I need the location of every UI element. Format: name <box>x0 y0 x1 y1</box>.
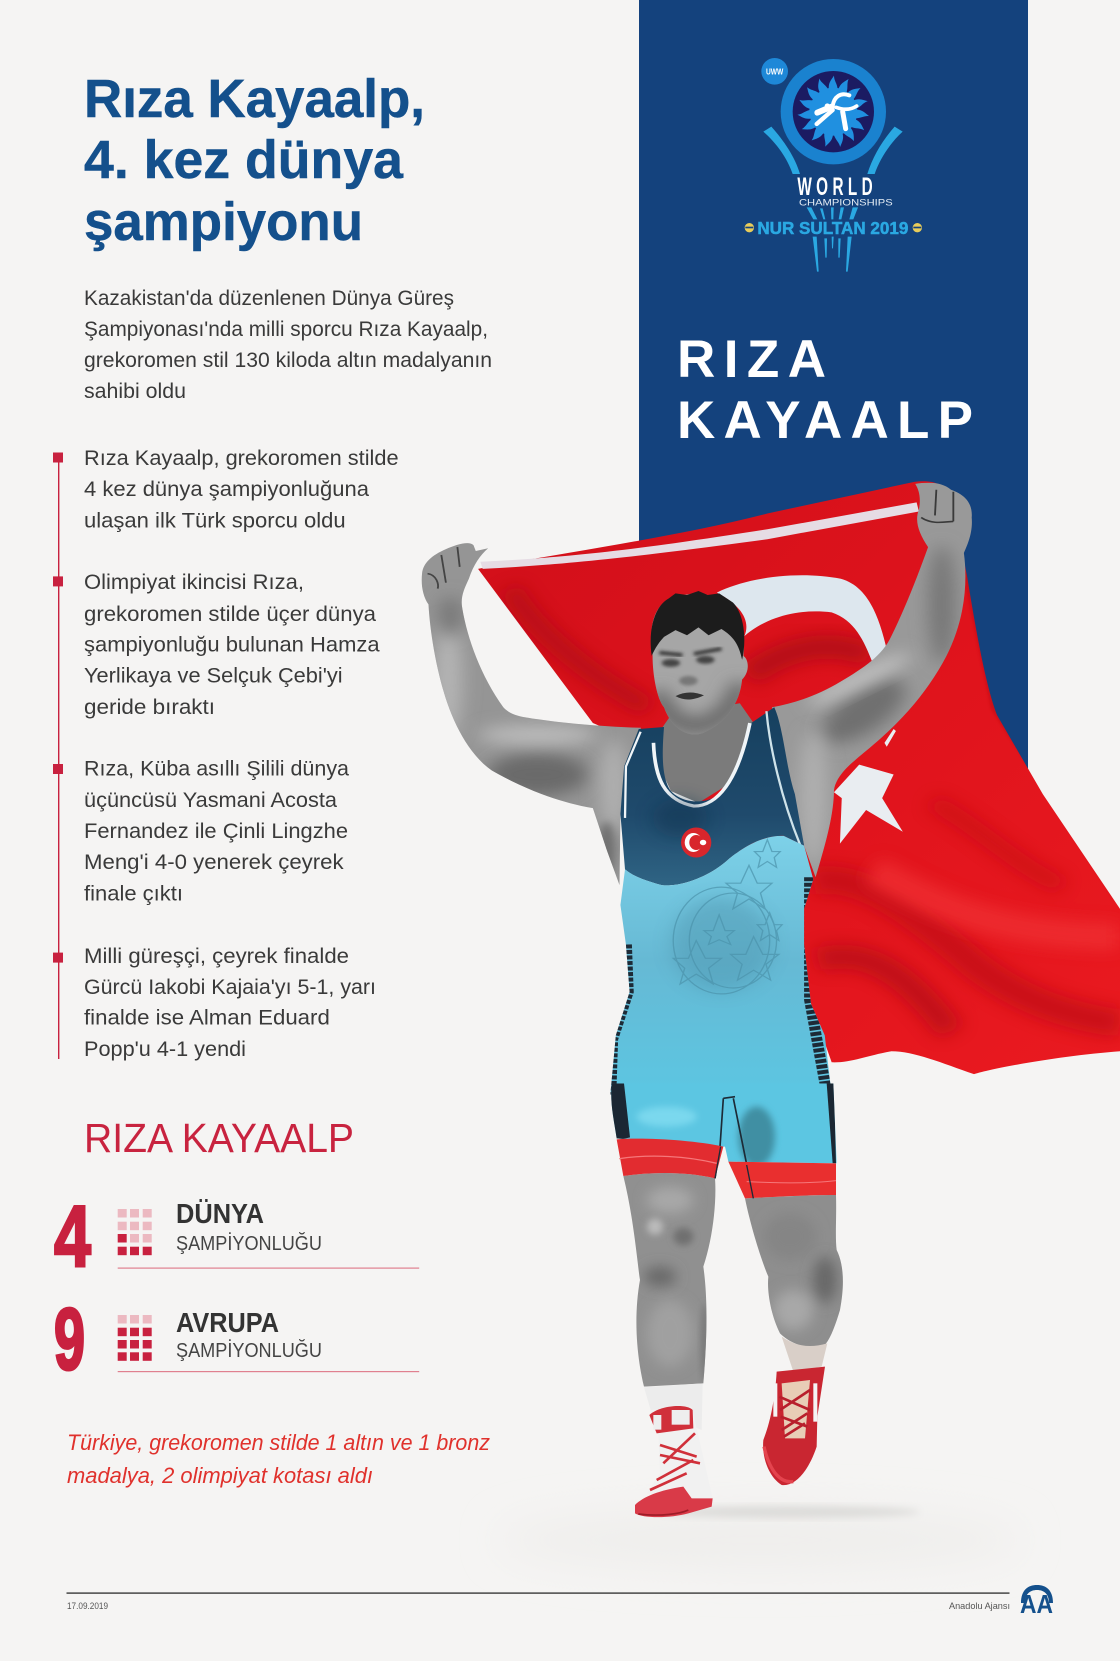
bullet 3: finale çıktı <box>84 882 183 906</box>
bullet 4: Gürcü Iakobi Kajaia'yı 5-1, yarı <box>84 975 376 999</box>
bullet 4 <box>53 944 376 1061</box>
timeline of bullet points <box>53 446 399 1061</box>
flag crescent <box>717 575 889 664</box>
head <box>652 594 748 734</box>
UWW badge: UWW <box>766 67 784 76</box>
heading: name in blue panel <box>677 330 973 450</box>
logo arcs and streaks <box>763 127 903 272</box>
title: Rıza Kayaalp, <box>84 69 425 129</box>
neck and chest <box>659 703 754 803</box>
CHAMPIONSHIPS: CHAMPIONSHIPS <box>799 198 893 208</box>
title: 4. kez dünya <box>84 130 404 190</box>
bullet 3: Rıza, Küba asıllı Şilili dünya <box>84 757 349 781</box>
note: Turkey medal summary: Türkiye, grekoromen stilde 1 altın ve 1 bronz <box>67 1430 490 1455</box>
flag hem band <box>480 502 919 569</box>
intro paragraph <box>84 286 492 403</box>
logo ring and emblem <box>781 59 886 164</box>
right boot <box>763 1337 827 1485</box>
illustration: wrestler lower body <box>607 1080 850 1517</box>
label: Dünya: DÜNYA <box>176 1198 264 1229</box>
title <box>84 69 425 252</box>
left shorts band <box>617 1139 723 1178</box>
side pattern <box>810 877 827 1095</box>
number 9: 9 <box>54 1291 85 1388</box>
shorts seams <box>715 1097 753 1197</box>
singlet chest sheen <box>653 798 708 838</box>
bullet 1: ulaşan ilk Türk sporcu oldu <box>84 509 346 533</box>
bullet 4: finalde ise Alman Eduard <box>84 1006 330 1030</box>
left leg <box>624 1173 716 1386</box>
bullet 2: şampiyonluğu bulunan Hamza <box>84 633 380 657</box>
ground shadow <box>500 1506 1020 1570</box>
bullet 1 <box>53 446 399 533</box>
logo: Anadolu Agency: AA <box>1020 1589 1053 1619</box>
singlet white trims <box>625 711 800 846</box>
NUR SULTAN 2019: NUR SULTAN 2019 <box>757 218 908 238</box>
left boot <box>635 1406 713 1517</box>
UWW badge <box>761 58 788 85</box>
label: Avrupa: AVRUPA <box>176 1307 279 1338</box>
singlet star pattern <box>673 840 782 994</box>
footer rule <box>66 1592 1010 1594</box>
left sock <box>644 1383 703 1430</box>
right arm and shoulder <box>767 478 979 881</box>
bullet 3: üçüncüsü Yasmani Acosta <box>84 788 337 812</box>
singlet dark top <box>620 707 804 885</box>
intro paragraph: Şampiyonası'nda milli sporcu Rıza Kayaalp, <box>84 317 488 341</box>
bullet 2: Olimpiyat ikincisi Rıza, <box>84 570 304 594</box>
illustration: wrestler upper body <box>414 478 979 1095</box>
hair <box>651 591 744 660</box>
bullet 1: Rıza Kayaalp, grekoromen stilde <box>84 446 399 470</box>
bullet 4: Milli güreşçi, çeyrek finalde <box>84 944 349 968</box>
left hand fingers <box>428 547 460 589</box>
panel: blue name column <box>639 0 1028 770</box>
heading: name in blue panel: KAYAALP <box>677 391 973 450</box>
bullet 3 <box>53 757 349 906</box>
footer credit: Anadolu Ajansı <box>949 1601 1010 1612</box>
left arm and shoulder <box>422 543 641 885</box>
pictogram grid: 9 of 12 <box>118 1315 152 1361</box>
bullet 1: 4 kez dünya şampiyonluğuna <box>84 477 369 501</box>
label: Şampiyonluğu second: ŞAMPİYONLUĞU <box>176 1339 322 1362</box>
shorts <box>611 1083 837 1164</box>
logo: UWW World Championships Nur Sultan 2019 <box>745 58 922 272</box>
flag star <box>834 729 903 844</box>
bullet 2 <box>53 570 380 719</box>
intro paragraph: sahibi oldu <box>84 379 186 403</box>
bullet 4: Popp'u 4-1 yendi <box>84 1037 246 1061</box>
heading: RIZA KAYAALP stats: RIZA KAYAALP <box>84 1115 354 1161</box>
singlet light-blue lower body <box>610 836 830 1095</box>
intro paragraph: grekoromen stil 130 kiloda altın madalyanın <box>84 348 492 372</box>
heading: name in blue panel: RIZA <box>677 330 826 389</box>
chest badge <box>681 827 711 857</box>
flames <box>797 76 870 148</box>
pictogram grid: 4 of 12 <box>118 1209 152 1255</box>
stat: 4 world championships <box>54 1188 419 1285</box>
label: Şampiyonluğu: ŞAMPİYONLUĞU <box>176 1232 322 1255</box>
right shorts band <box>728 1162 836 1198</box>
illustration: Turkish flag <box>478 481 1120 1074</box>
flag folds <box>510 573 1120 1031</box>
right hand fingers <box>921 490 953 522</box>
stat: 9 European championships <box>54 1291 419 1388</box>
title: şampiyonu <box>84 192 363 252</box>
bullet 3: Fernandez ile Çinli Lingzhe <box>84 819 348 843</box>
footer date: 17.09.2019 <box>67 1601 108 1612</box>
note: Turkey medal summary: madalya, 2 olimpiyat kotası aldı <box>67 1463 373 1488</box>
bullet 2: Yerlikaya ve Selçuk Çebi'yi <box>84 663 343 687</box>
note: Turkey medal summary <box>67 1430 490 1488</box>
intro paragraph: Kazakistan'da düzenlenen Dünya Güreş <box>84 286 454 310</box>
bullet 3: Meng'i 4-0 yenerek çeyrek <box>84 850 344 874</box>
number 4: 4 <box>54 1188 91 1285</box>
small yellow emblems <box>745 223 922 232</box>
bullet 2: geride bıraktı <box>84 695 215 719</box>
wrestlers pictogram <box>817 94 857 129</box>
WORLD: WORLD <box>797 173 873 201</box>
right leg <box>745 1195 843 1346</box>
bullet 2: grekoromen stilde üçer dünya <box>84 602 376 626</box>
